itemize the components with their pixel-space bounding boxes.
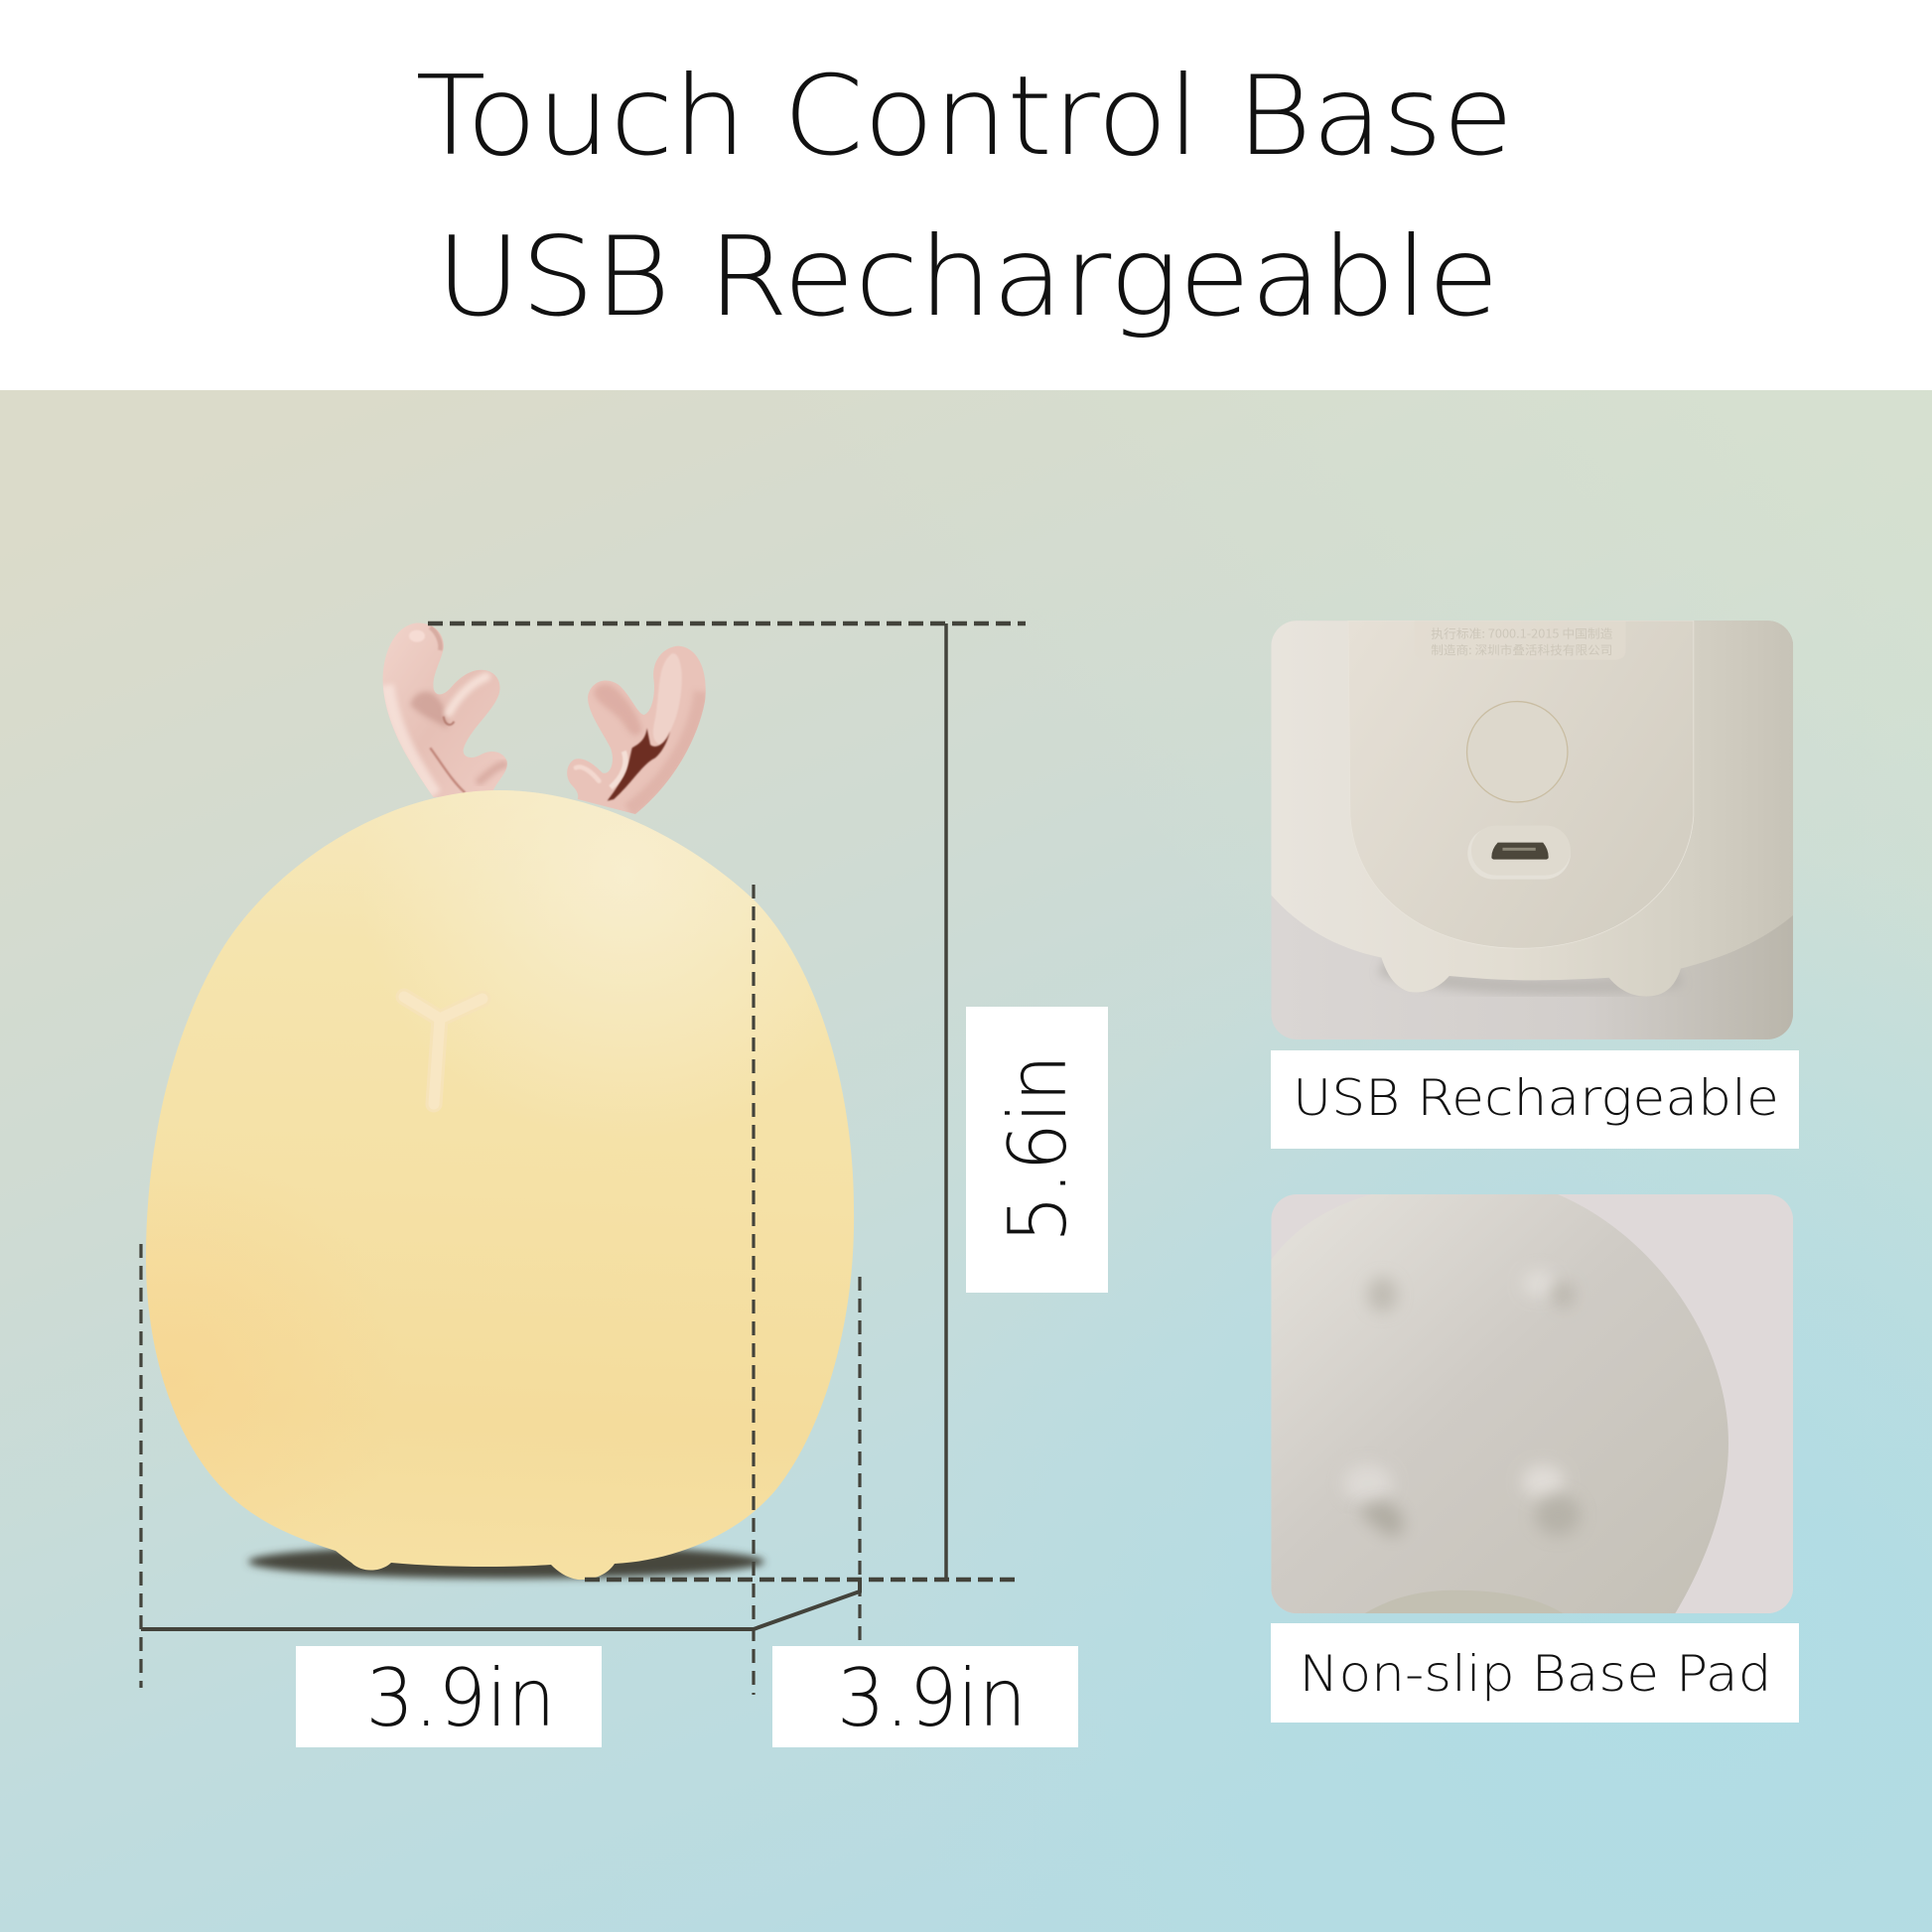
label: depth 3.9in <box>772 1646 1078 1747</box>
right antler <box>567 646 706 814</box>
label: width 3.9in <box>296 1646 602 1747</box>
dimension lines <box>141 623 1026 1695</box>
antler-shaped Y mark <box>404 997 483 1104</box>
label: height 5.6in <box>966 1007 1108 1293</box>
height dimension <box>428 623 1026 1580</box>
lamp body <box>146 790 854 1580</box>
caption: Non-slip Base Pad: Non-slip Base Pad <box>1299 1645 1771 1703</box>
rating sticker: 制造商: 深圳市叠活科技有限公司 <box>1431 641 1612 658</box>
caption: Non-slip Base Pad <box>1271 1623 1799 1723</box>
title <box>415 53 1513 342</box>
pad bumps <box>1342 1271 1581 1536</box>
title: Touch Control Base <box>415 53 1513 181</box>
contact shadow <box>1381 967 1681 987</box>
base plate <box>1348 621 1694 948</box>
label: width 3.9in: 3.9in <box>365 1652 556 1744</box>
touch button <box>1467 702 1568 802</box>
rating sticker <box>1432 627 1612 655</box>
product: deer lamp <box>146 623 854 1580</box>
panel: USB port photo <box>1271 621 1793 1039</box>
label: height 5.6in: 5.6in <box>992 1054 1084 1243</box>
label: depth 3.9in: 3.9in <box>837 1652 1027 1744</box>
lamp base <box>1271 621 1793 997</box>
USB port <box>1467 831 1571 880</box>
floor <box>1271 621 1793 1039</box>
depth dimension <box>754 1277 860 1646</box>
background <box>0 390 1932 1932</box>
base disc <box>1271 1194 1728 1613</box>
caption: USB Rechargeable: USB Rechargeable <box>1293 1069 1779 1127</box>
panel: non-slip base photo <box>1271 1194 1793 1613</box>
ground shadow <box>248 1545 764 1579</box>
title: USB Rechargeable <box>436 213 1499 342</box>
caption: USB Rechargeable <box>1271 1050 1799 1149</box>
width dimension <box>141 885 754 1695</box>
inner ring <box>1365 1590 1563 1613</box>
rating sticker: 执行标准: 7000.1-2015 中国制造 <box>1431 625 1613 642</box>
left antler <box>383 623 507 797</box>
